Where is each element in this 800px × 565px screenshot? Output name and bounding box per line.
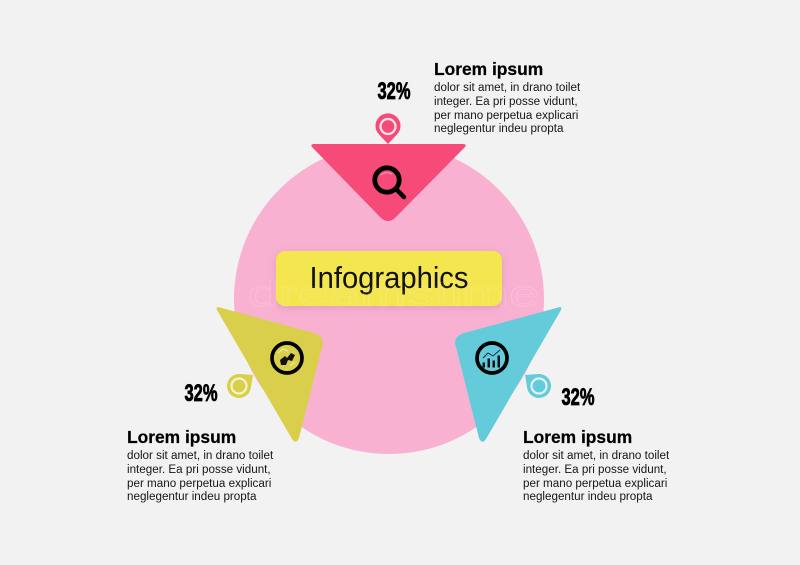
watermark: dreamstime [248,273,540,314]
right percentage: 32% [562,384,594,411]
icon: top pin [376,113,400,144]
text block: top: per mano perpetua explicari [434,109,578,122]
panel: right blue triangle [455,307,561,442]
text block: left: integer. Ea pri posse vidunt, [127,463,271,476]
text block: top: dolor sit amet, in drano toilet [434,81,580,94]
text block: left: neglegentur indeu propta [127,490,256,503]
text block: right: Lorem ipsum [523,427,632,447]
text block: top: integer. Ea pri posse vidunt, [434,95,578,108]
left percentage: 32% [184,380,218,407]
text block: right: integer. Ea pri posse vidunt, [523,463,667,476]
icon: right pin [525,374,551,398]
text block: left: Lorem ipsum [127,427,236,447]
text block: right: per mano perpetua explicari [523,477,667,490]
icon: magnifier [375,168,404,197]
top percentage: 32% [378,78,410,105]
text block: top: Lorem ipsum [434,59,543,79]
panel: left yellow triangle [217,307,323,442]
icon: left pin [227,374,253,398]
pink central circle [234,144,544,454]
text block: right [523,427,670,503]
text block: top [434,59,580,135]
text block: left [127,427,274,503]
text block: top: neglegentur indeu propta [434,122,563,135]
text block: left: per mano perpetua explicari [127,477,271,490]
text block: right: neglegentur indeu propta [523,490,652,503]
text block: right: dolor sit amet, in drano toilet [523,449,669,462]
label shadow [276,253,502,308]
text block: left: dolor sit amet, in drano toilet [127,449,273,462]
title: Infographics [310,260,468,295]
panel: top pink triangle [311,144,466,221]
title box [276,251,502,306]
icon: handshake [272,343,302,373]
icon: chart [477,343,507,373]
